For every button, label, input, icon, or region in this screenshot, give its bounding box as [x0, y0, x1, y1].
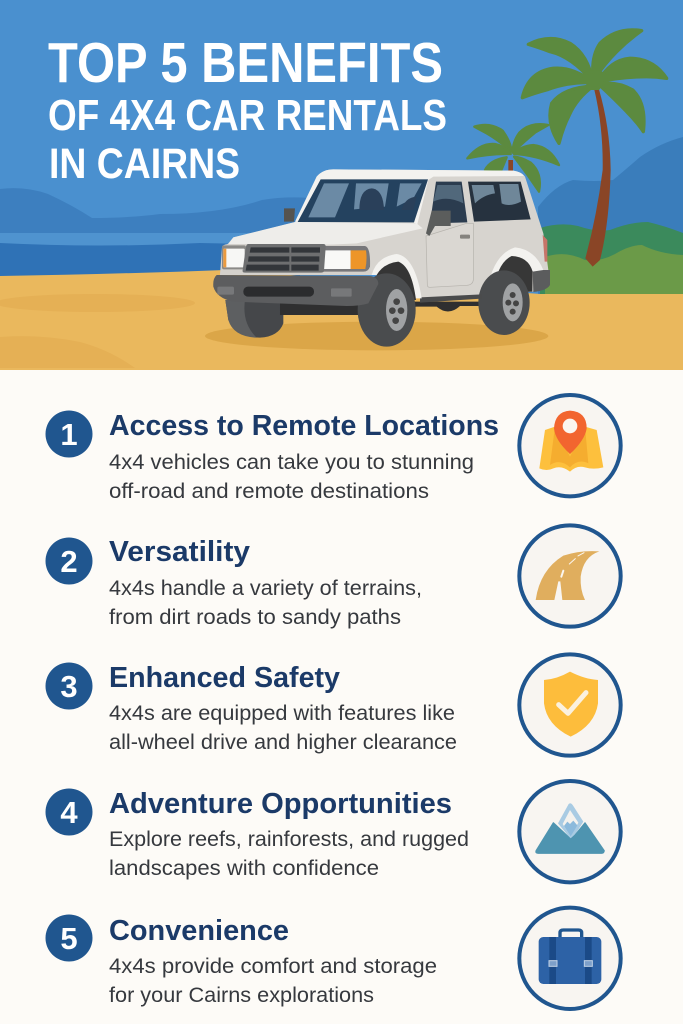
number badge 2: 2	[60, 544, 78, 579]
icon: shield	[519, 654, 621, 756]
description 4: landscapes with confidence	[109, 857, 379, 880]
dark green hills	[540, 222, 683, 294]
large palm fronds	[522, 30, 667, 143]
door	[426, 223, 473, 287]
front left wheel	[225, 300, 283, 338]
benefit 5	[46, 908, 621, 1009]
sand shadows	[0, 294, 195, 312]
description 3: 4x4s are equipped with features like	[109, 702, 455, 725]
number badge 5	[46, 914, 92, 962]
chassis	[280, 302, 490, 315]
title line 3: IN CAIRNS	[49, 140, 240, 188]
sand	[0, 270, 683, 370]
heading 2: Versatility	[109, 536, 250, 568]
tail light	[543, 235, 547, 262]
rear wheel	[478, 270, 530, 335]
title	[48, 31, 447, 188]
light green hills	[545, 245, 683, 296]
number badge 4: 4	[60, 795, 78, 830]
side mirror	[426, 211, 451, 236]
right headlight	[323, 246, 370, 272]
grille	[243, 244, 326, 273]
4x4 vehicle	[205, 169, 550, 350]
palm trees	[467, 30, 667, 267]
description 3: all-wheel drive and higher clearance	[109, 731, 457, 754]
large palm trunk	[585, 88, 611, 267]
right mountains	[538, 137, 683, 294]
description 1: 4x4 vehicles can take you to stunning	[109, 451, 474, 474]
rear bumper	[533, 270, 550, 292]
number badge 3: 3	[60, 669, 78, 704]
hero beach scene	[0, 0, 683, 370]
number badge 3	[46, 662, 92, 710]
description 2: from dirt roads to sandy paths	[109, 606, 401, 629]
icon: mountain	[519, 781, 621, 882]
benefit 4	[46, 781, 621, 882]
fog lamps	[217, 287, 234, 295]
heading 4: Adventure Opportunities	[109, 788, 452, 820]
number badge 1	[46, 410, 92, 458]
windshield	[298, 179, 428, 222]
hood	[228, 222, 423, 245]
front wheel arch	[372, 254, 422, 298]
description 1: off-road and remote destinations	[109, 480, 429, 503]
small palm	[467, 124, 559, 192]
benefit 3	[46, 654, 621, 756]
roof and pillars	[295, 169, 524, 224]
heading 5: Convenience	[109, 915, 289, 947]
description 5: 4x4s provide comfort and storage	[109, 955, 437, 978]
heading 1: Access to Remote Locations	[109, 410, 499, 442]
heading 3: Enhanced Safety	[109, 662, 340, 694]
left mountains	[0, 188, 310, 240]
number badge 2	[46, 538, 92, 584]
number badge 5: 5	[60, 921, 78, 956]
bumper slot	[243, 287, 314, 297]
front wheel	[358, 273, 416, 347]
ground shadow	[205, 322, 548, 350]
icon: road	[519, 525, 621, 627]
description 4: Explore reefs, rainforests, and rugged	[109, 828, 469, 851]
side windows	[430, 182, 467, 223]
left headlight	[222, 245, 246, 269]
benefit 1	[46, 395, 621, 503]
bumper	[213, 275, 378, 306]
sea	[0, 233, 300, 285]
title line 2: OF 4X4 CAR RENTALS	[48, 91, 447, 140]
description 2: 4x4s handle a variety of terrains,	[109, 577, 422, 600]
number badge 4	[46, 788, 92, 836]
benefit 2	[46, 525, 621, 629]
title line 1: TOP 5 BENEFITS	[48, 31, 443, 95]
underbody sill	[420, 294, 482, 303]
rear wheel arch	[487, 247, 543, 295]
body shell	[220, 169, 548, 298]
front face	[220, 244, 371, 275]
left mirror	[284, 208, 295, 222]
description 5: for your Cairns explorations	[109, 984, 374, 1007]
icon: map pin	[519, 395, 621, 496]
number badge 1: 1	[60, 417, 78, 452]
icon: suitcase	[519, 908, 621, 1009]
